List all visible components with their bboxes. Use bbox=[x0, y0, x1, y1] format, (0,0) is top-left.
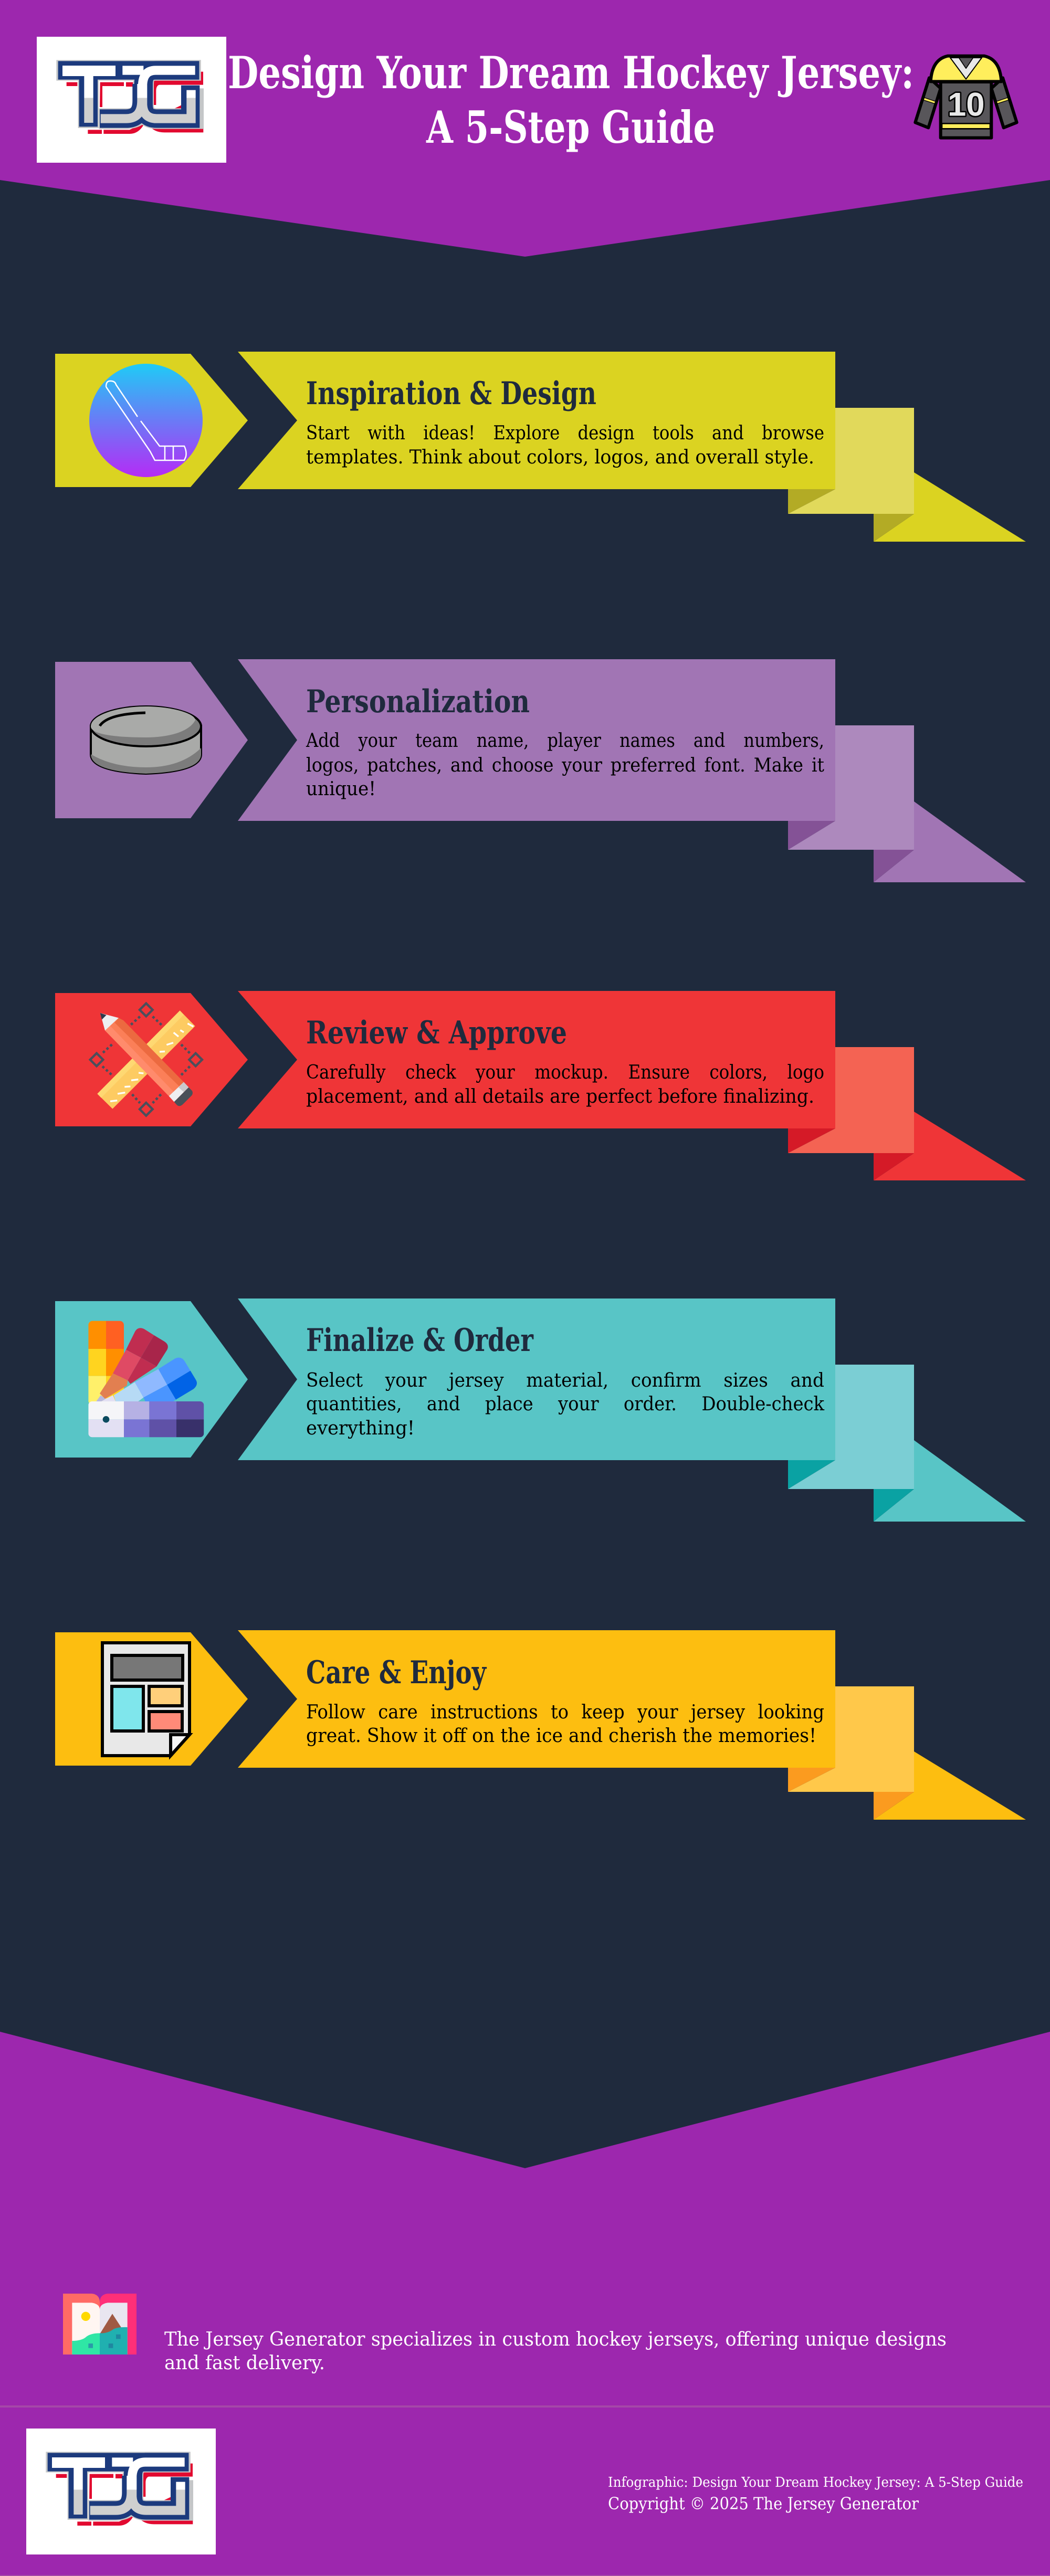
heading: Inspiration & Design bbox=[306, 375, 596, 412]
body text: great. Show it off on the ice and cherish the memories! bbox=[306, 1725, 816, 1747]
body text bbox=[306, 1702, 824, 1747]
body text bbox=[306, 730, 824, 800]
heading: Personalization bbox=[306, 683, 530, 720]
body text: placement, and all details are perfect before finalizing. bbox=[306, 1086, 814, 1107]
body text: Add your team name, player names and numbers, bbox=[306, 730, 824, 752]
body text: quantities, and place your order. Double-check bbox=[306, 1393, 824, 1415]
footer credits: Copyright © 2025 The Jersey Generator bbox=[608, 2494, 919, 2514]
icon: colour swatch fan bbox=[88, 1321, 204, 1437]
footer credits bbox=[608, 2475, 1023, 2514]
icon: hockey jersey: 10 bbox=[948, 87, 985, 123]
body text: Select your jersey material, confirm sizes and bbox=[306, 1370, 824, 1391]
heading: Care & Enjoy bbox=[306, 1654, 487, 1691]
body text bbox=[306, 1370, 824, 1439]
ribbon tail bbox=[788, 725, 1026, 882]
body text: templates. Think about colors, logos, and overall style. bbox=[306, 447, 814, 468]
footer credits: Infographic: Design Your Dream Hockey Jersey: A 5-Step Guide bbox=[608, 2475, 1023, 2490]
footer panel bbox=[0, 2032, 1050, 2576]
body text: unique! bbox=[306, 778, 376, 800]
title: Design Your Dream Hockey Jersey: bbox=[228, 47, 914, 99]
main banner bbox=[238, 1630, 835, 1768]
icon: hockey jersey bbox=[915, 56, 1017, 138]
main banner bbox=[238, 352, 835, 489]
title bbox=[228, 47, 914, 153]
ribbon tail bbox=[788, 1047, 1026, 1180]
company description bbox=[164, 2329, 947, 2374]
main banner bbox=[238, 991, 835, 1128]
icon: hockey puck bbox=[91, 706, 201, 774]
body text bbox=[306, 1062, 824, 1107]
step 3: Review & Approve bbox=[55, 991, 1026, 1180]
icon panel bbox=[55, 993, 248, 1126]
ribbon tail bbox=[788, 1686, 1026, 1820]
ribbon tail bbox=[788, 1365, 1026, 1522]
body text: Follow care instructions to keep your jersey looking bbox=[306, 1702, 824, 1723]
body text: everything! bbox=[306, 1418, 415, 1439]
icon: hockey stick bbox=[89, 364, 203, 477]
body text: logos, patches, and choose your preferred font. Make it bbox=[306, 755, 824, 776]
body text: Start with ideas! Explore design tools and browse bbox=[306, 423, 824, 444]
heading: Review & Approve bbox=[306, 1015, 567, 1051]
step 1: Inspiration & Design bbox=[55, 352, 1026, 542]
company description: The Jersey Generator specializes in custom hockey jerseys, offering unique designs bbox=[164, 2329, 947, 2350]
icon: care guide document bbox=[102, 1643, 190, 1756]
icon panel bbox=[55, 1632, 248, 1766]
icon: pencil and ruler bbox=[90, 1004, 202, 1116]
step 5: Care & Enjoy bbox=[55, 1630, 1026, 1820]
company description: and fast delivery. bbox=[164, 2352, 325, 2374]
main banner bbox=[238, 1298, 835, 1460]
icon panel bbox=[55, 1301, 248, 1458]
body text bbox=[306, 423, 824, 468]
body text: Carefully check your mockup. Ensure colors, logo bbox=[306, 1062, 824, 1083]
title: A 5-Step Guide bbox=[426, 101, 715, 153]
main banner bbox=[238, 659, 835, 821]
heading: Finalize & Order bbox=[306, 1322, 533, 1359]
header logo bbox=[37, 37, 226, 163]
icon panel bbox=[55, 662, 248, 818]
step 4: Finalize & Order bbox=[55, 1298, 1026, 1522]
header banner bbox=[0, 0, 1050, 257]
ribbon tail bbox=[788, 408, 1026, 542]
footer logo bbox=[26, 2429, 216, 2554]
icon panel bbox=[55, 354, 248, 487]
step 2: Personalization bbox=[55, 659, 1026, 882]
icon: picture book bbox=[63, 2294, 136, 2355]
